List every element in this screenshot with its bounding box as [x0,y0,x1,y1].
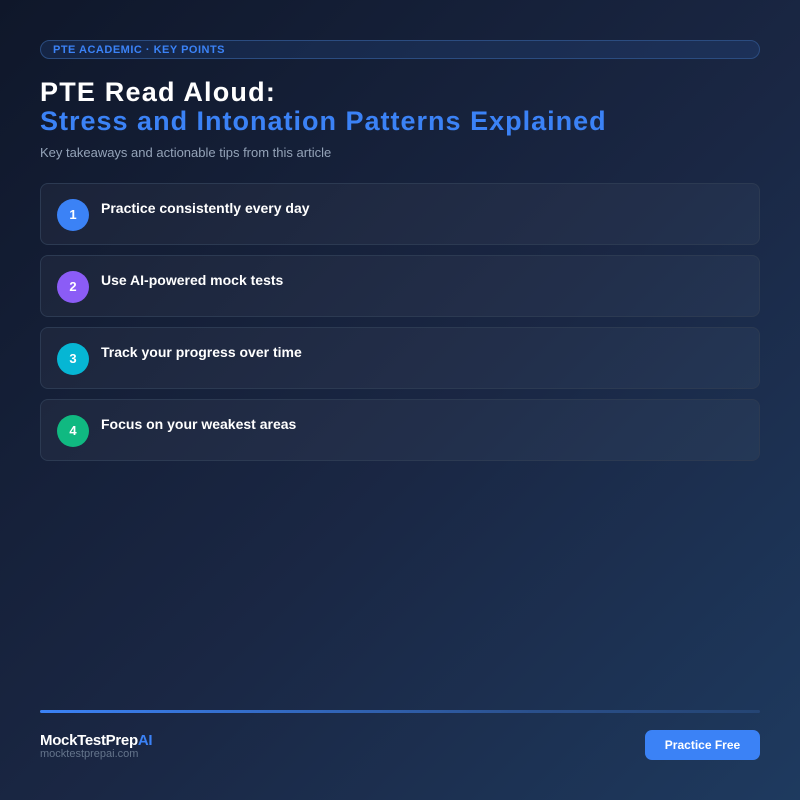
url: mocktestprepai.com [40,748,138,760]
brand: MockTestPrepAI [40,732,152,749]
subtitle: Key takeaways and actionable tips from this article [40,145,331,160]
title line 2: Stress and Intonation Patterns Explained [40,106,607,136]
card 1: Practice consistently every day [101,200,310,216]
card 4: 4 [69,423,77,438]
footer line [40,710,760,713]
tag pill: PTE ACADEMIC · KEY POINTS [53,44,225,56]
card 1: 1 [69,207,77,222]
card 3 [40,327,760,389]
title line 1: PTE Read Aloud: [40,77,276,107]
card 4: Focus on your weakest areas [101,416,296,432]
card 2: Use AI-powered mock tests [101,272,283,288]
card 3: 3 [69,351,77,366]
card 1 [40,183,760,245]
button: Practice Free [665,738,740,752]
card 2 [40,255,760,317]
tag pill [40,40,760,59]
card 2: 2 [69,279,77,294]
button [645,730,760,760]
card 3: Track your progress over time [101,344,302,360]
card 4 [40,399,760,461]
